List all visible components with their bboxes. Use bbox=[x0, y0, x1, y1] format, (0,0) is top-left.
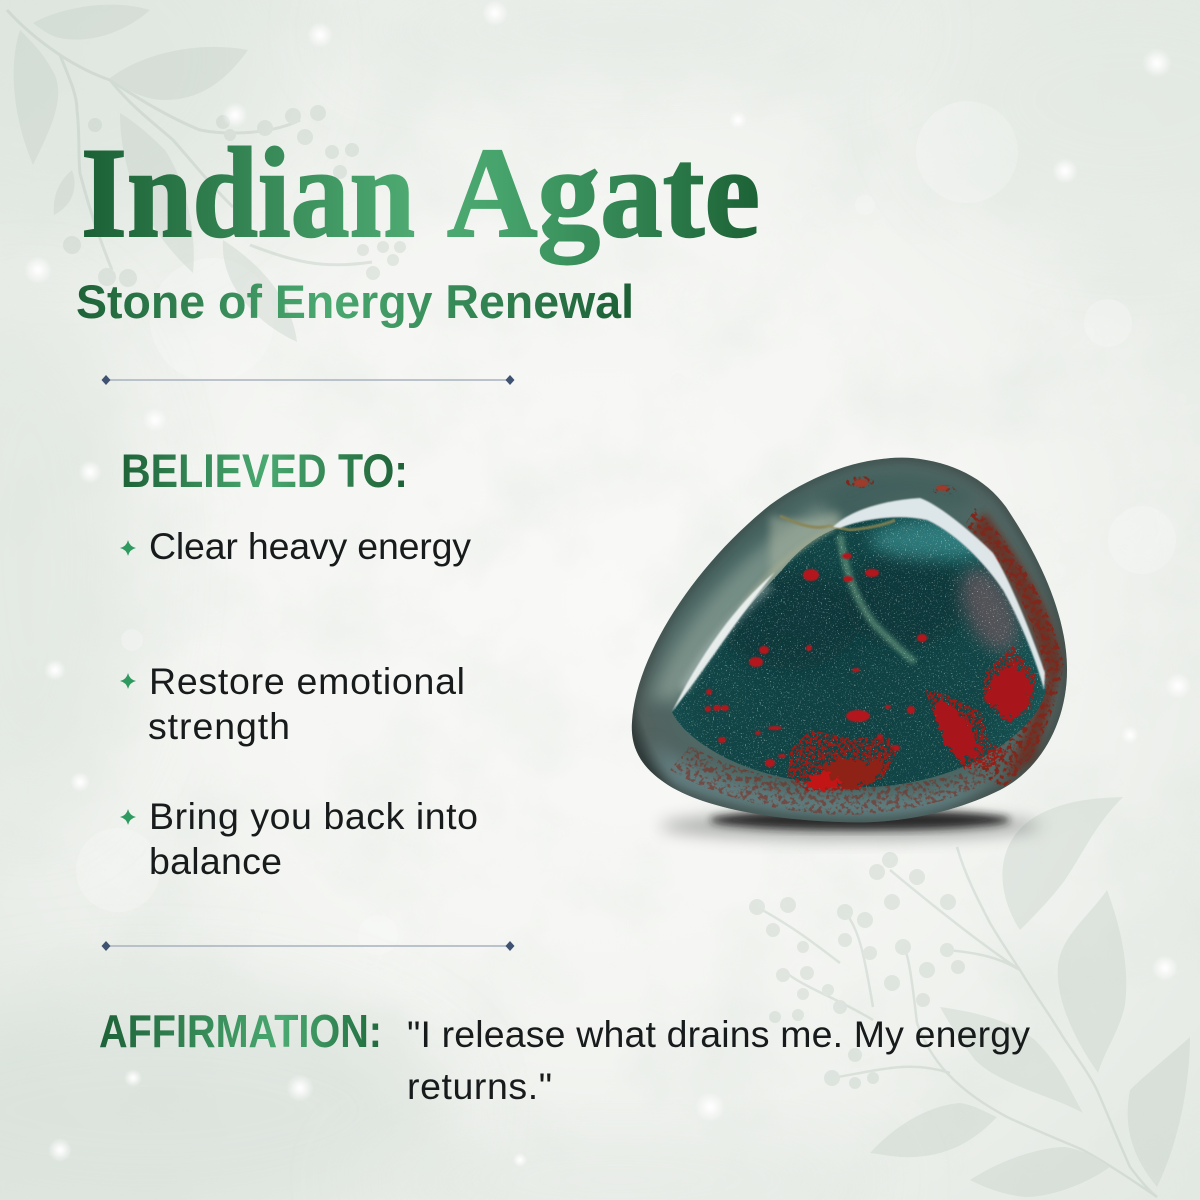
bullet: restore emotional strength: strength bbox=[148, 705, 290, 747]
affirmation quote: returns." bbox=[407, 1065, 552, 1107]
white highlight: upper arc bbox=[833, 498, 1045, 690]
brown flecks on the rim bbox=[670, 476, 1064, 815]
stone shadow bbox=[660, 810, 1040, 840]
decorative leaves: top left bbox=[7, 5, 406, 342]
bullet: restore emotional strength: Restore emotional bbox=[149, 660, 465, 702]
divider: top bbox=[102, 375, 514, 385]
decorative leaves: bottom right bbox=[749, 797, 1190, 1197]
affirmation label: AFFIRMATION: bbox=[99, 1005, 382, 1057]
gemstone: bloodstone bbox=[632, 458, 1068, 822]
title: Indian bbox=[81, 121, 415, 264]
speckled red clusters bbox=[788, 646, 1037, 792]
affirmation bbox=[99, 1005, 1030, 1107]
bullet: restore emotional strength bbox=[120, 660, 465, 747]
bullet: bring you back into balance: Bring you back into bbox=[149, 795, 478, 837]
red jasper spots bbox=[705, 479, 948, 767]
title bbox=[81, 121, 760, 265]
green inner core bbox=[672, 518, 1046, 787]
divider: bottom bbox=[102, 941, 514, 951]
subtitle: Stone of Energy Renewal bbox=[76, 275, 634, 328]
heading: believed to: BELIEVED TO: bbox=[121, 444, 408, 497]
title: Agate bbox=[447, 121, 760, 265]
white highlight: left arc bbox=[672, 572, 775, 712]
pale bokeh circles bbox=[76, 101, 1176, 955]
stone rim tones bbox=[632, 458, 1067, 822]
bullet: clear heavy energy: Clear heavy energy bbox=[149, 525, 471, 567]
olive band bbox=[780, 516, 895, 530]
panel: believed to bbox=[120, 444, 478, 882]
affirmation quote bbox=[407, 1013, 1030, 1107]
affirmation quote: "I release what drains me. My energy bbox=[407, 1013, 1030, 1055]
solid red patches bbox=[807, 662, 1032, 790]
bullet: bring you back into balance: balance bbox=[149, 840, 282, 882]
bullet: bring you back into balance bbox=[120, 795, 478, 882]
